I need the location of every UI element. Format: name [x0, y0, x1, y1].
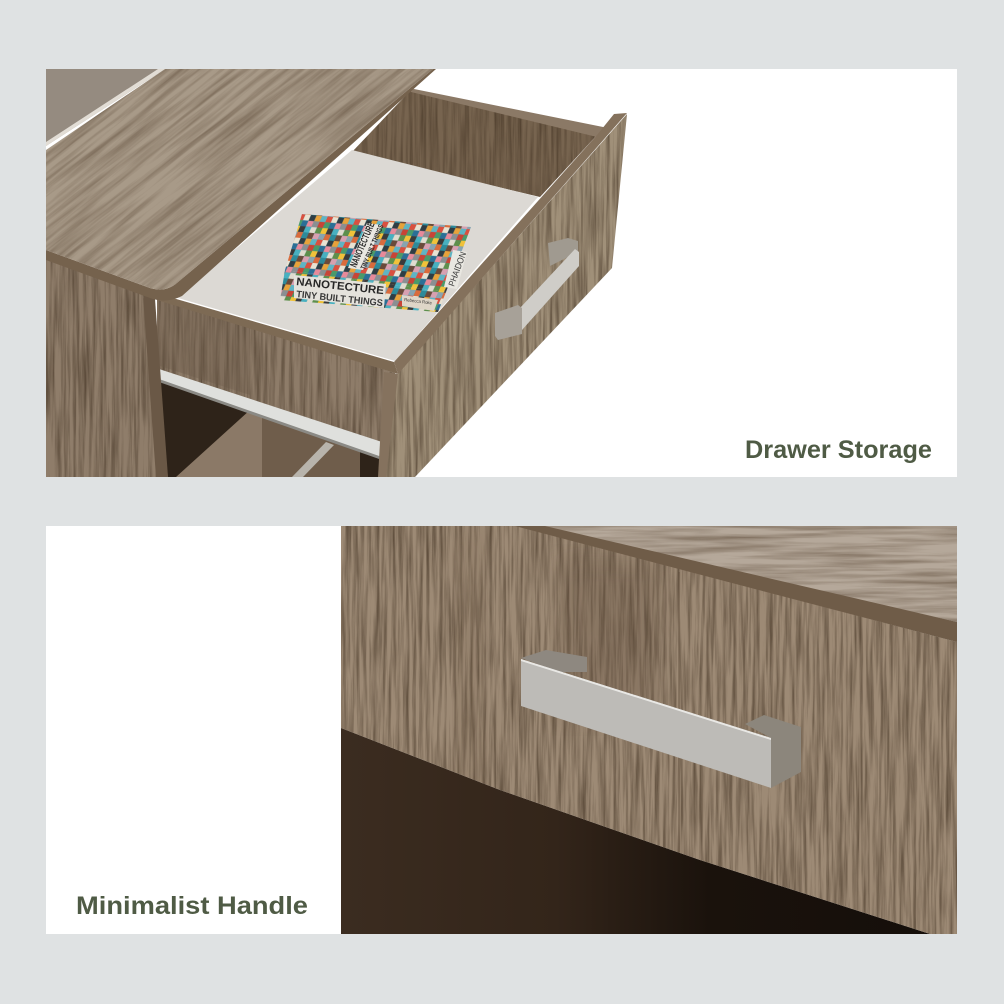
author text: Rebecca Roke — [404, 297, 433, 305]
publisher strip — [444, 250, 467, 289]
book spine — [280, 270, 446, 312]
publisher text: PHAIDON — [446, 250, 468, 288]
drawer floor — [178, 150, 538, 361]
spine title text: NANOTECTURE — [296, 276, 384, 297]
cover title text: NANOTECTURE — [349, 221, 378, 269]
drawer handle — [495, 238, 579, 340]
handle near foot — [521, 650, 587, 672]
tabletop — [545, 526, 957, 622]
mirror edge — [46, 69, 165, 146]
drawer front rim — [157, 294, 398, 374]
infographic canvas — [46, 69, 957, 934]
spine label — [294, 275, 386, 308]
tabletop edge — [515, 526, 957, 642]
cabinet left side panel — [46, 250, 171, 480]
dark shelf wood — [341, 725, 957, 935]
drawer slide rail — [159, 369, 382, 458]
spine subtitle text: TINY BUILT THINGS — [296, 289, 383, 309]
lower cabinet door panels — [176, 410, 360, 477]
book — [280, 214, 471, 312]
wood tone variation — [464, 544, 680, 853]
handle — [521, 650, 801, 788]
label: Drawer Storage: Drawer Storage — [745, 436, 932, 464]
panel: drawer storage — [46, 69, 957, 477]
author label — [402, 295, 438, 311]
cabinet interior below drawer — [161, 382, 379, 477]
panel: minimalist handle — [46, 526, 960, 935]
drawer side rim — [394, 113, 627, 374]
photo: open drawer — [46, 69, 627, 477]
drawer back wall — [354, 91, 596, 197]
side panel edge — [143, 295, 168, 477]
handle far foot — [745, 715, 801, 788]
drawer front panel — [157, 300, 395, 442]
label: Minimalist Handle: Minimalist Handle — [76, 892, 308, 920]
cover title strip — [348, 223, 382, 270]
drawer back rim — [411, 87, 613, 137]
book cover — [285, 214, 471, 292]
drawer side outer face — [380, 105, 630, 480]
cabinet top edge — [46, 69, 436, 301]
mirror panel — [46, 69, 165, 146]
cabinet top surface — [46, 69, 433, 290]
drawer front corner post — [378, 372, 398, 477]
photo: handle close-up — [341, 526, 960, 935]
cover subtitle text: TINY BUILT THINGS — [359, 223, 386, 271]
drawer front wood — [341, 526, 957, 934]
handle bar face — [521, 659, 771, 788]
